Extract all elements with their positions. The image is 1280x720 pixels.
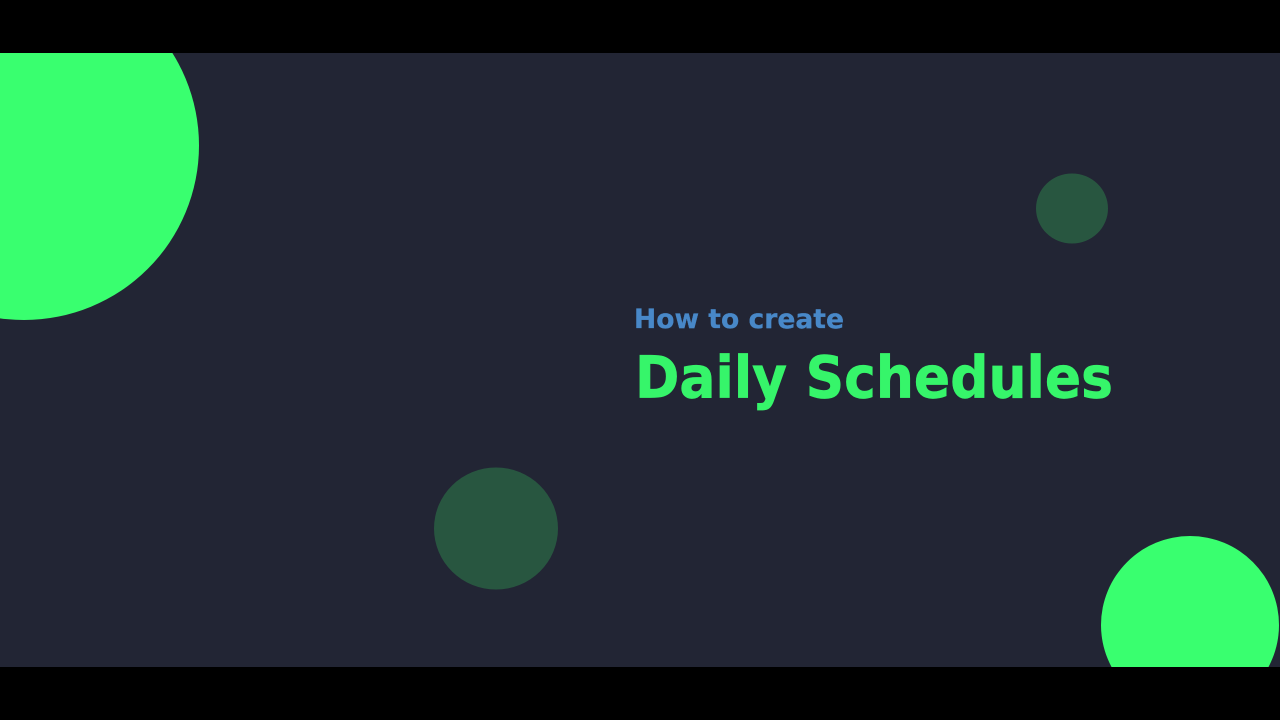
title: Daily Schedules [635, 344, 1113, 412]
circle: medium centre [434, 468, 558, 590]
circle: small top-right [1036, 174, 1108, 244]
circle: bottom-right [1101, 536, 1279, 667]
circle: large top-left [0, 53, 199, 320]
subtitle: How to create [634, 304, 844, 335]
